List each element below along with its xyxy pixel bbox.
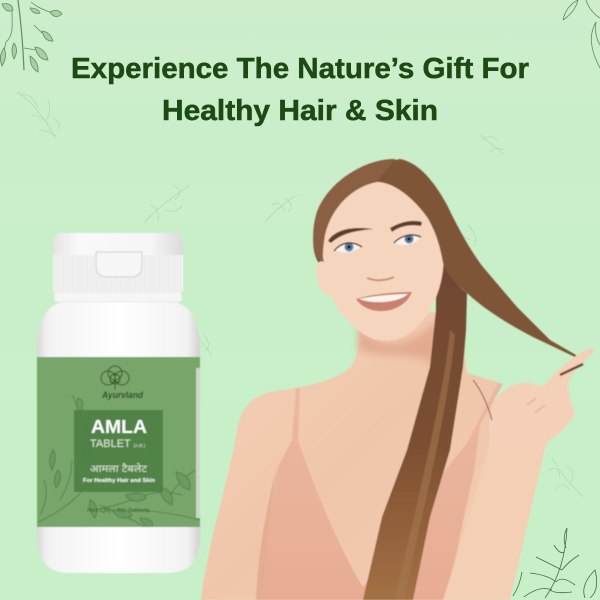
peach top [262,383,503,600]
decorative leaves: top right branch [563,0,600,68]
brand name: Ayurvland [101,390,143,400]
product name: AMLA [91,416,147,437]
front hair lock [377,159,576,357]
right eye [394,234,421,245]
bottle label [37,357,200,530]
shoulders and arms [201,310,500,600]
product bottle [37,233,200,573]
hair left side [313,159,395,262]
brand logo tree [101,366,129,390]
bottle body [37,302,200,573]
decorative leaves: top left branch [0,0,62,72]
product name panel [74,410,163,492]
hand [489,347,594,452]
hair highlight [395,330,455,598]
finger hair strand [560,364,583,375]
decorative leaves: faint background sprigs [17,92,583,497]
tablet line: TABLET (A.B.) [90,438,146,450]
nose [367,277,394,280]
title line 1: Experience The Nature’s Gift For [71,53,529,85]
bottle cap [53,233,183,302]
title [71,53,529,127]
long hair [363,250,467,600]
net quantity: Net.Qty - 60 Tablets [87,508,150,514]
title line 2: Healthy Hair & Skin [162,95,438,127]
neck shading [358,316,442,368]
hair behind head [313,159,430,290]
right forearm [443,440,547,600]
right eyebrow [390,221,422,232]
armpit shading [256,467,277,600]
thin hair strand [473,380,492,420]
hindi name: आमला टैबलेट [90,463,148,475]
left eyebrow [328,228,373,243]
decorative leaves: bottom right sprig [513,528,597,598]
left eye [334,242,362,252]
mouth [356,292,412,311]
face [316,181,444,341]
tagline: For Healthy Hair and Skin [83,478,155,484]
woman portrait [201,159,594,600]
label botanical artwork [38,395,200,530]
